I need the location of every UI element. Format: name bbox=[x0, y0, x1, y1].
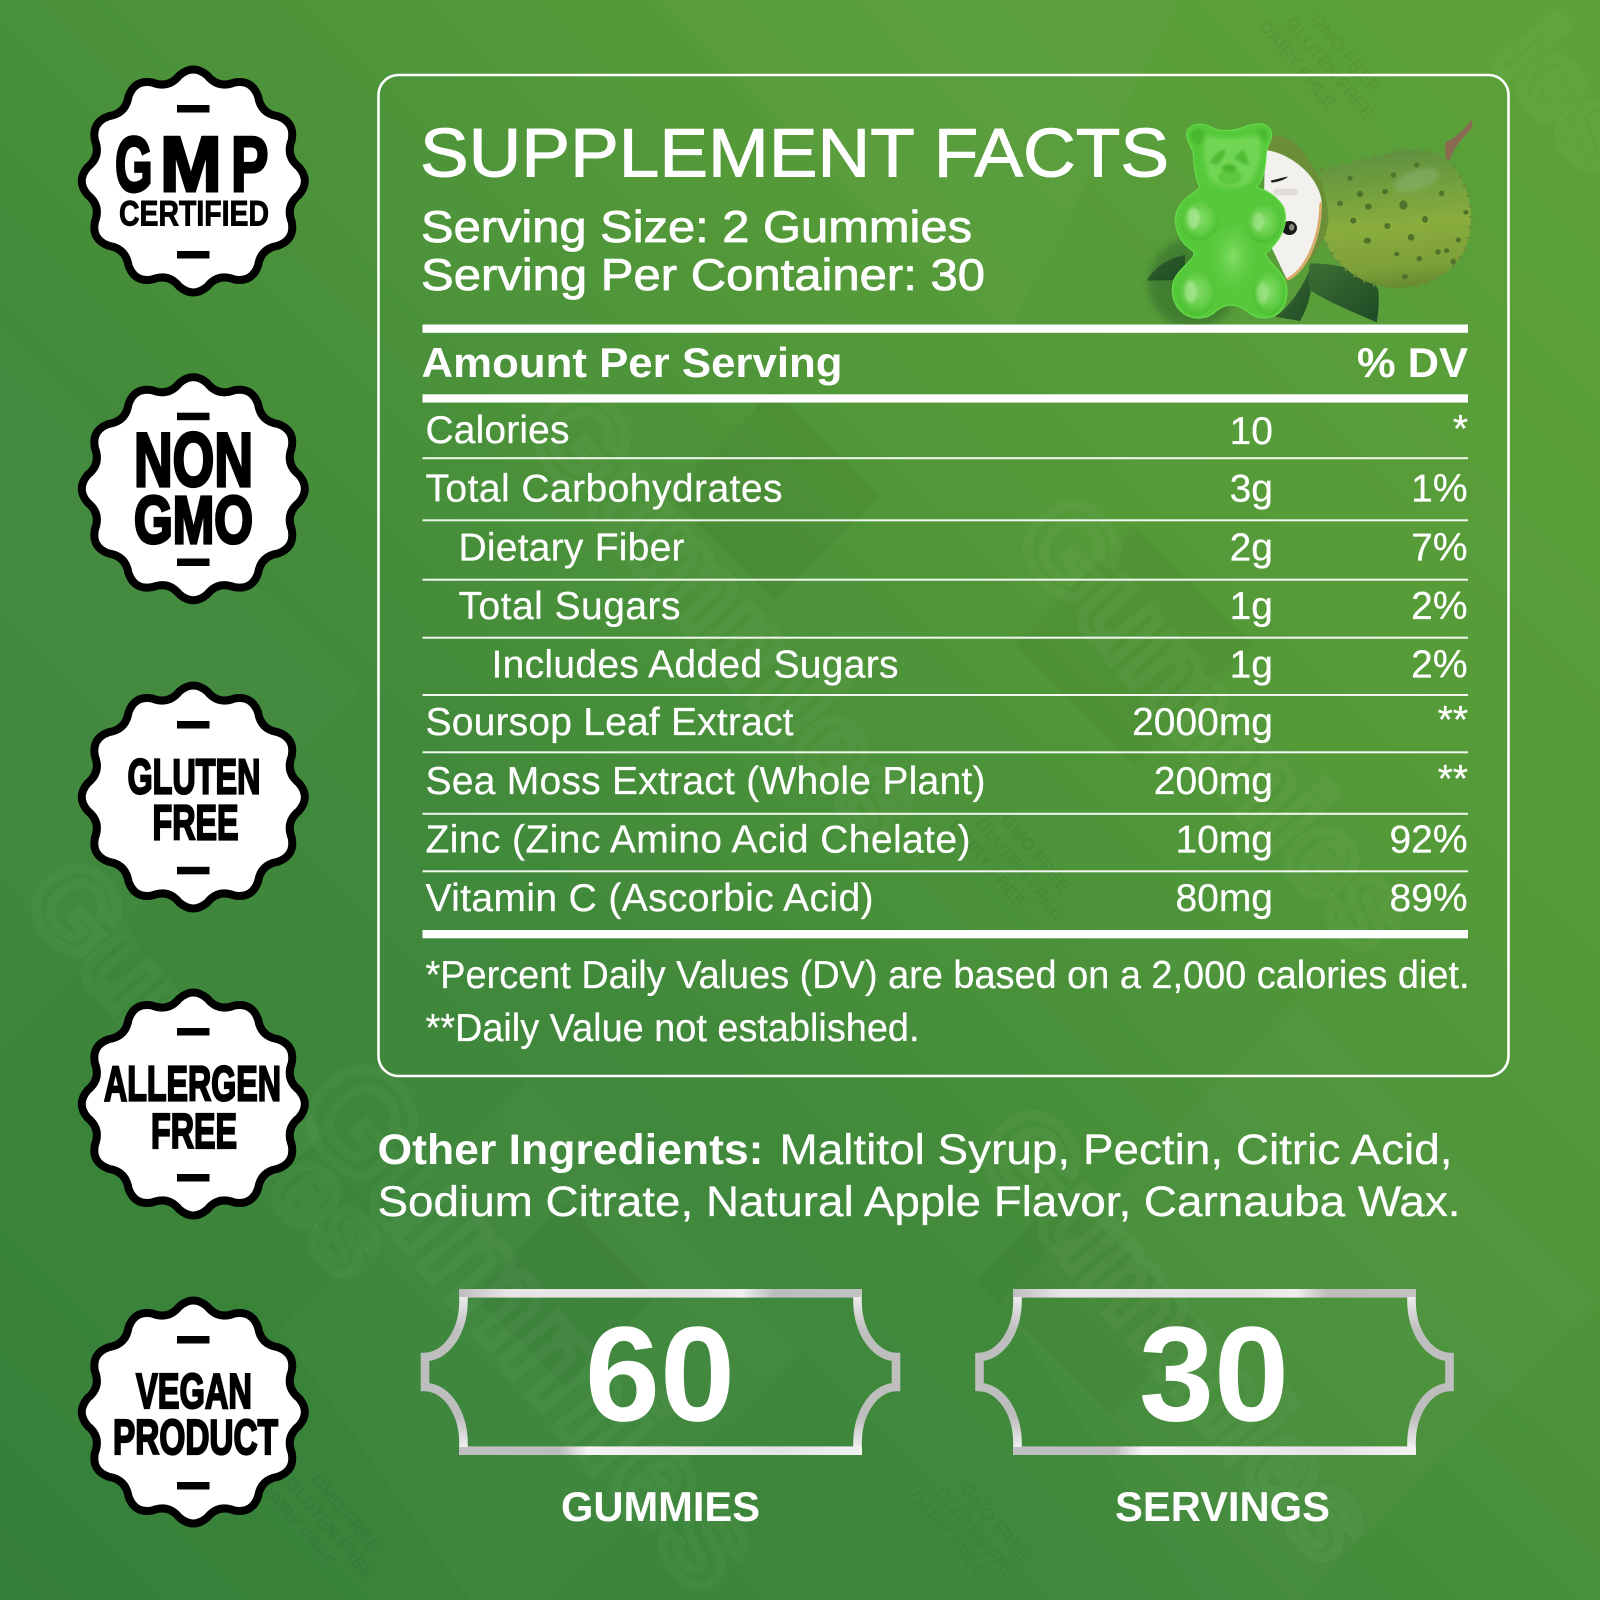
row: dietary fiber: 7% bbox=[1411, 526, 1468, 570]
row: calories: Calories bbox=[426, 409, 570, 452]
row: dietary fiber: 2g bbox=[1230, 526, 1273, 570]
illustration: gummy bear with soursop fruit bbox=[1147, 119, 1473, 328]
row: vitamin c bbox=[426, 877, 1468, 920]
serving info: Serving Size: 2 Gummies bbox=[421, 203, 972, 252]
background watermark pattern: Gummies bbox=[950, 1081, 1404, 1586]
row: zinc bbox=[422, 818, 1468, 872]
background watermark pattern: DAIRY FREE bbox=[255, 1477, 340, 1572]
serving info: Serving Per Container: 30 bbox=[421, 251, 985, 300]
rule bbox=[422, 394, 1468, 403]
row: soursop leaf extract bbox=[422, 699, 1468, 753]
badge: gluten free: FREE bbox=[152, 796, 238, 850]
badge: GMP certified bbox=[82, 69, 305, 293]
label servings: SERVINGS bbox=[1115, 1483, 1330, 1530]
background watermark pattern: DAIRY FREE bbox=[945, 817, 1030, 912]
row: zinc: Zinc (Zinc Amino Acid Chelate) bbox=[426, 818, 970, 862]
title: SUPPLEMENT FACTS bbox=[420, 114, 1169, 192]
background watermark pattern: GLUTEN FREE bbox=[931, 1483, 1028, 1593]
row: sea moss extract: 200mg bbox=[1154, 760, 1273, 803]
background watermark pattern: GMO FREE bbox=[1307, 10, 1384, 96]
row: total carbohydrates: 1% bbox=[1411, 468, 1468, 510]
row: vitamin c: 89% bbox=[1389, 877, 1468, 920]
background watermark pattern: Gummies bbox=[500, 361, 954, 866]
background watermark pattern: GLUTEN FREE bbox=[281, 1473, 378, 1583]
row: vitamin c: Vitamin C (Ascorbic Acid) bbox=[426, 877, 874, 920]
background watermark pattern: GLUTEN FREE bbox=[971, 813, 1068, 923]
row: total carbohydrates: Total Carbohydrates bbox=[426, 468, 782, 510]
row: includes added sugars: Includes Added Sugars bbox=[492, 643, 898, 686]
background watermark pattern: Gummies bbox=[2, 836, 418, 1299]
row: total sugars: 2% bbox=[1411, 585, 1468, 628]
badge: non GMO: GMO bbox=[134, 483, 253, 558]
badge: vegan product bbox=[82, 1300, 305, 1524]
badge: allergen free bbox=[82, 992, 305, 1216]
table header: Amount Per Serving bbox=[422, 339, 842, 386]
plaque: 30 servings bbox=[980, 1289, 1450, 1530]
row: calories: 10 bbox=[1230, 410, 1273, 453]
badge: GMP certified: M bbox=[160, 121, 222, 208]
icon: soursop cut half bbox=[1263, 135, 1329, 282]
table header: % DV bbox=[1357, 339, 1468, 386]
badge: allergen free: ALLERGEN bbox=[104, 1058, 281, 1112]
rule bbox=[422, 324, 1468, 333]
other ingredients text: Other Ingredients: bbox=[378, 1126, 764, 1174]
plaque frame bbox=[425, 1289, 896, 1455]
background watermark pattern: GMO FREE bbox=[957, 1480, 1034, 1566]
row: dietary fiber: Dietary Fiber bbox=[458, 526, 684, 570]
other ingredients text bbox=[378, 1126, 1460, 1226]
row: calories: * bbox=[1453, 408, 1468, 451]
table header bbox=[422, 339, 1468, 386]
rule bbox=[422, 930, 1468, 938]
background watermark pattern: DAIRY FREE bbox=[1255, 17, 1340, 112]
row: calories bbox=[422, 408, 1468, 459]
row: sea moss extract: ** bbox=[1438, 758, 1468, 801]
row: includes added sugars bbox=[422, 643, 1468, 696]
badge: GMP certified: G bbox=[115, 120, 153, 208]
row: dietary fiber bbox=[422, 526, 1468, 581]
icon: bear shadow bbox=[1148, 238, 1238, 328]
row: zinc: 92% bbox=[1389, 818, 1468, 862]
row: zinc: 10mg bbox=[1175, 818, 1273, 862]
badge: vegan product: PRODUCT bbox=[113, 1411, 278, 1465]
other ingredients text: Sodium Citrate, Natural Apple Flavor, Carnauba Wax. bbox=[378, 1178, 1460, 1226]
row: includes added sugars: 2% bbox=[1411, 643, 1468, 686]
label gummies: GUMMIES bbox=[561, 1483, 760, 1530]
badge: non GMO bbox=[82, 377, 305, 600]
row: total sugars: Total Sugars bbox=[458, 585, 680, 628]
row: includes added sugars: 1g bbox=[1230, 643, 1273, 686]
row: soursop leaf extract: Soursop Leaf Extract bbox=[426, 701, 794, 744]
footnotes: **Daily Value not established. bbox=[426, 1007, 920, 1050]
panel: supplement facts bbox=[378, 75, 1508, 1076]
background watermark pattern: GMO FREE bbox=[307, 1470, 384, 1556]
badge: gluten free bbox=[82, 685, 305, 909]
serving info bbox=[421, 203, 985, 300]
row: sea moss extract: Sea Moss Extract (Whole Plant) bbox=[426, 760, 986, 803]
badge: GMP certified: CERTIFIED bbox=[119, 194, 269, 234]
plaque: 60 gummies bbox=[425, 1289, 896, 1530]
background watermark pattern: GLUTEN FREE bbox=[1281, 13, 1378, 123]
icon: leaves bbox=[1147, 255, 1379, 322]
row: sea moss extract bbox=[422, 758, 1468, 815]
badge: GMP certified: P bbox=[231, 121, 268, 208]
icon: gummy bear bbox=[1172, 124, 1287, 318]
row: total carbohydrates: 3g bbox=[1230, 468, 1273, 510]
badge: vegan product: VEGAN bbox=[136, 1365, 252, 1419]
plaque frame bbox=[980, 1289, 1450, 1455]
badge: gluten free: GLUTEN bbox=[128, 750, 260, 804]
footnotes: *Percent Daily Values (DV) are based on a 2,000 calories diet. bbox=[426, 954, 1470, 997]
icon: soursop stem bbox=[1445, 119, 1473, 161]
badge: allergen free: FREE bbox=[151, 1105, 237, 1159]
row: vitamin c: 80mg bbox=[1175, 877, 1273, 920]
icon: soursop whole fruit bbox=[1321, 150, 1471, 288]
badge: non GMO: NON bbox=[134, 418, 253, 503]
row: total carbohydrates bbox=[422, 468, 1468, 521]
number 30: 30 bbox=[1139, 1298, 1289, 1450]
other ingredients text: Maltitol Syrup, Pectin, Citric Acid, bbox=[780, 1126, 1452, 1174]
row: total sugars bbox=[422, 585, 1468, 639]
row: total sugars: 1g bbox=[1230, 585, 1273, 628]
footnotes bbox=[426, 954, 1470, 1050]
row: soursop leaf extract: 2000mg bbox=[1132, 701, 1273, 744]
number 60: 60 bbox=[585, 1298, 735, 1450]
background watermark pattern: GMO FREE bbox=[997, 810, 1074, 896]
row: soursop leaf extract: ** bbox=[1438, 699, 1468, 742]
background watermark pattern: Gummies bbox=[990, 471, 1444, 976]
background watermark pattern: DAIRY FREE bbox=[905, 1487, 990, 1582]
